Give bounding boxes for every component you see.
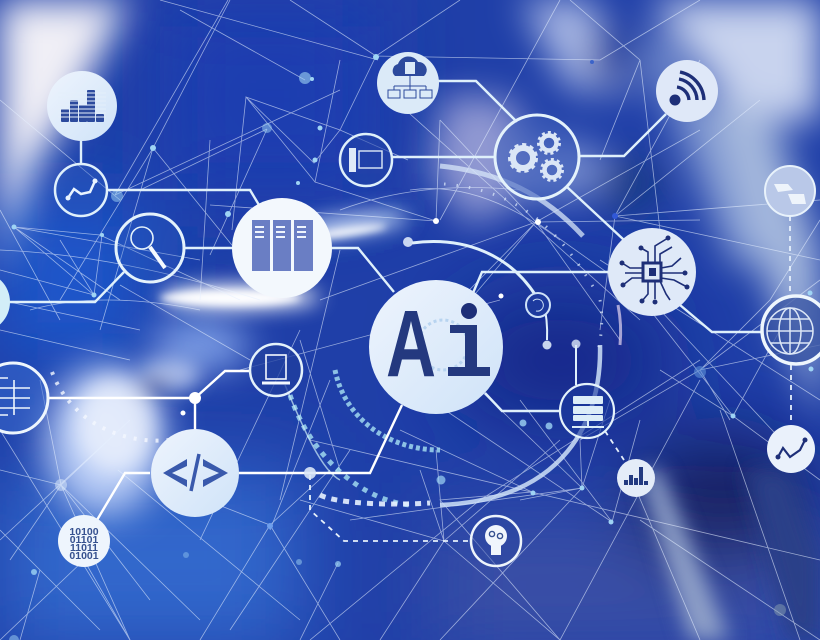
node: globe ring <box>762 296 820 364</box>
node: servers <box>232 198 332 298</box>
node: bulb ring <box>471 516 521 566</box>
node: chip <box>608 228 696 316</box>
small ring near Ai <box>526 293 550 317</box>
connector lines <box>0 81 762 520</box>
node: binary: 11011 <box>70 542 98 554</box>
node: circuit ring <box>0 363 48 433</box>
node: monitor ring <box>340 134 392 186</box>
node: trend small <box>767 425 815 473</box>
node: binary <box>58 515 110 567</box>
node: trend ring <box>55 164 107 216</box>
node: left edge <box>0 272 10 332</box>
node: bar chart <box>47 71 117 141</box>
node: gears ring <box>495 115 579 199</box>
node: Ai center <box>369 280 503 414</box>
node: server ring <box>560 384 614 438</box>
dashed connectors <box>310 216 791 541</box>
node: wifi <box>656 60 718 122</box>
node: code <box>151 429 239 517</box>
node: search ring <box>116 214 184 282</box>
node: binary: 10100 <box>69 526 99 538</box>
node: small bars <box>617 459 655 497</box>
HUD arcs and dotted rings <box>52 166 621 505</box>
node: laptop ring <box>250 344 302 396</box>
node: binary: 01001 <box>69 550 99 562</box>
connector nodes <box>189 237 580 479</box>
node: Ai center: A <box>386 291 436 397</box>
node: cloud network <box>377 52 439 114</box>
node: binary: 01101 <box>70 534 98 546</box>
node: arrows <box>765 166 815 216</box>
